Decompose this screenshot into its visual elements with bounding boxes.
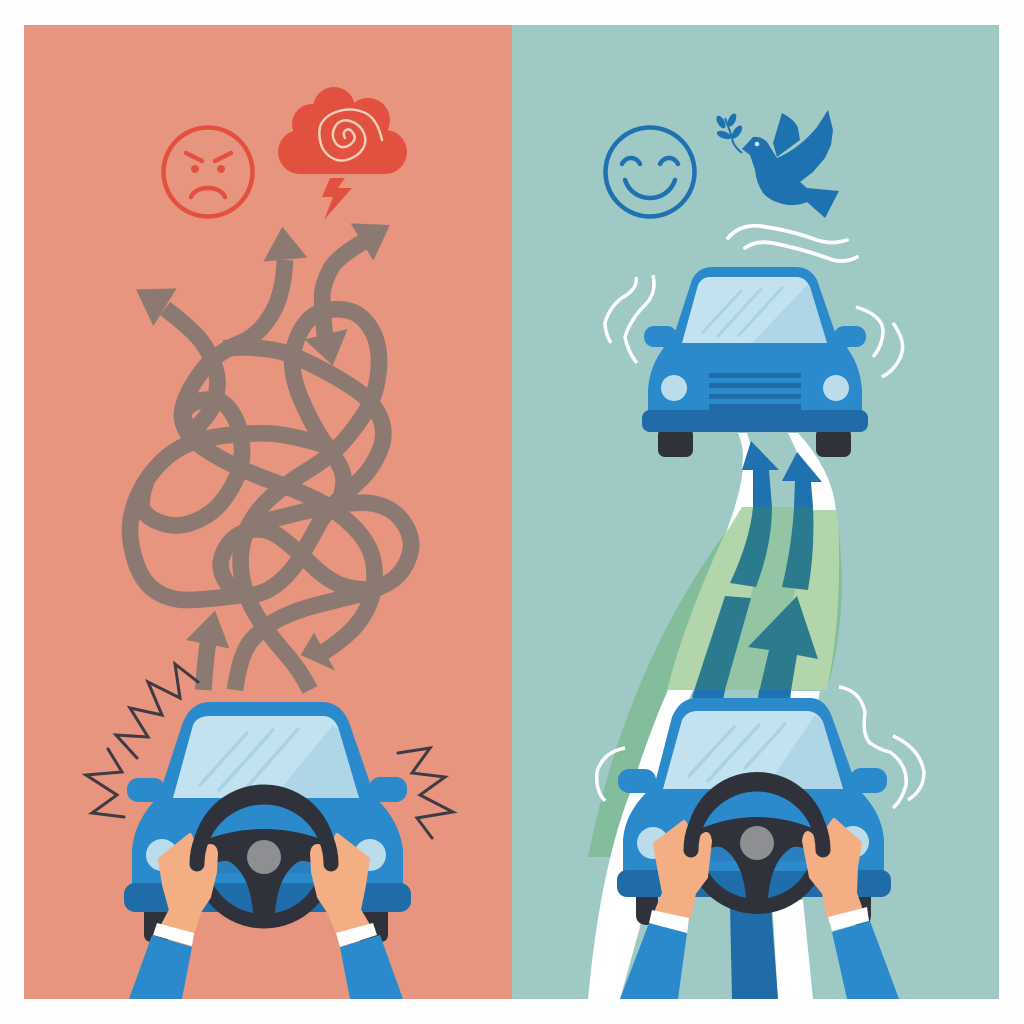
arrows: lane arrows [692,441,822,700]
icon: calm wave lines around near car [597,687,924,808]
panel: stressed driver [24,25,512,999]
road: green path and white lanes [588,433,842,999]
icon: breeze lines [728,226,857,261]
chart: tangled arrows [130,223,411,690]
icon: dove with olive branch [714,110,839,218]
icon: calm wave lines around distant car [605,275,903,377]
panel: calm driver [512,25,999,999]
icon: stress zigzag lines [86,664,453,838]
steering wheel and hands [129,784,403,999]
icon: storm cloud with spiral [278,87,407,220]
car: calm driver [617,698,891,925]
icon: angry face [164,128,252,216]
steering wheel and hands [620,772,899,999]
icon: smiling face [606,128,694,216]
car: stressed driver [124,702,411,943]
car: distant calm car [642,267,868,457]
